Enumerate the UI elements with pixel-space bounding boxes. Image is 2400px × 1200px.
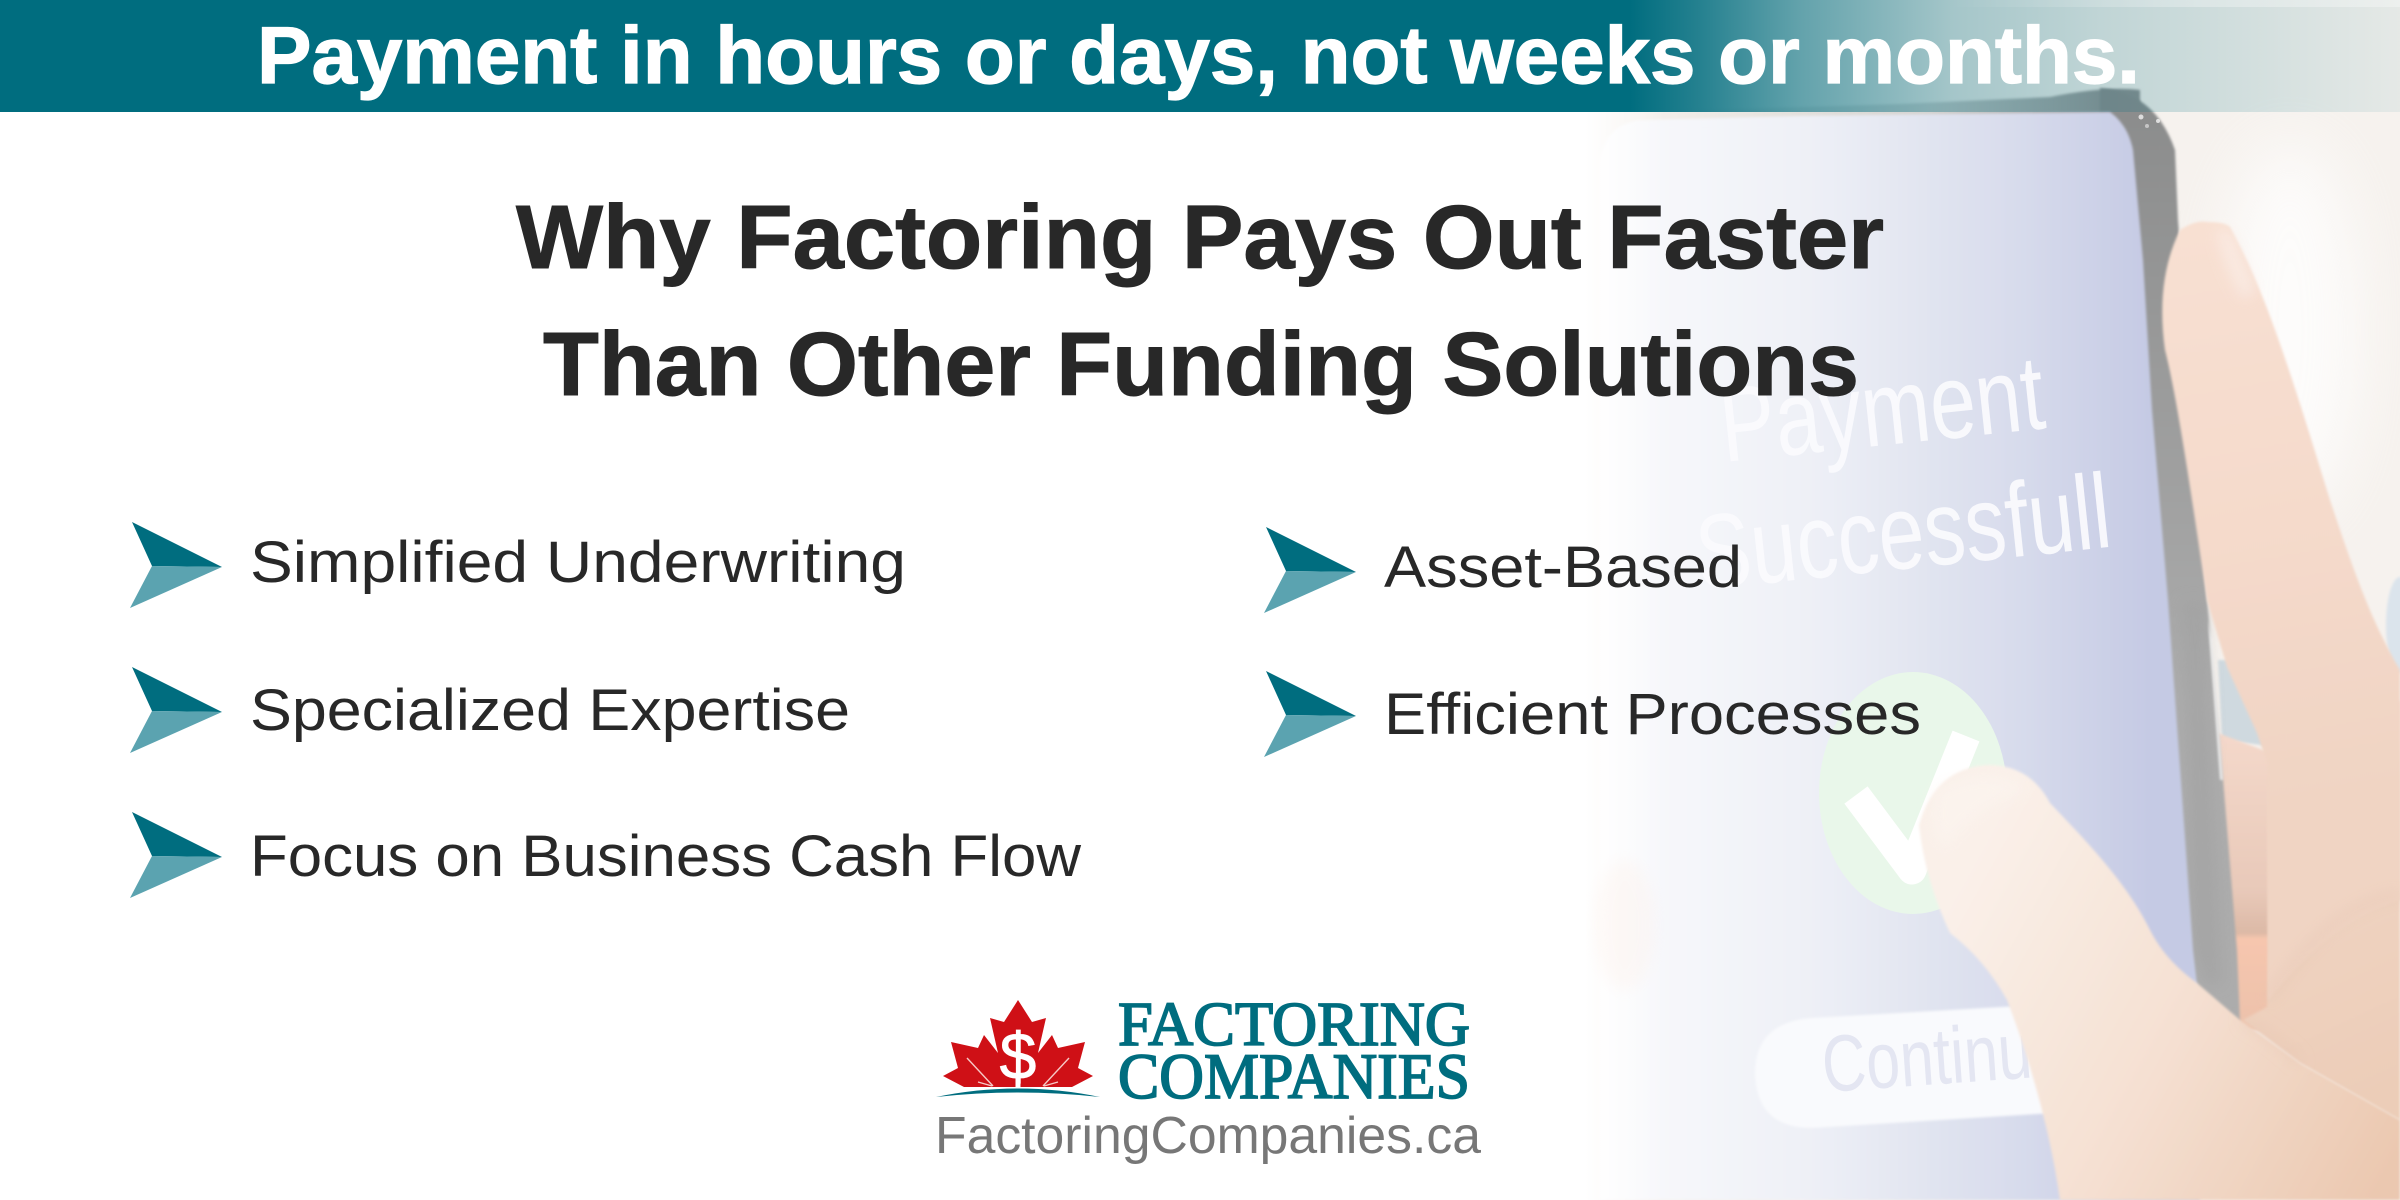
- screen text: Payment Successfull: [1747, 360, 2108, 583]
- logo: [935, 991, 1481, 1165]
- background photo: hand tapping a phone: [1586, 0, 2400, 1200]
- title: Why Factoring Pays Out Faster: [516, 188, 1884, 288]
- icon: maple leaf with dollar sign: [936, 1000, 1100, 1097]
- top banner: [0, 0, 2400, 112]
- website url: FactoringCompanies.ca: [935, 1107, 1481, 1165]
- continue button: [1758, 1006, 2044, 1127]
- banner headline: Payment in hours or days, not weeks or months.: [257, 11, 2140, 101]
- item: Asset-Based: Asset-Based: [1384, 535, 1742, 600]
- hand: index finger: [1919, 765, 2400, 1200]
- continue button: Continu: [1819, 1006, 2035, 1109]
- phone bezel: [1705, 86, 2241, 1020]
- hand: palm: [2243, 700, 2400, 1120]
- item: Simplified Underwriting: Simplified Underwriting: [250, 530, 906, 595]
- success check badge: [1819, 672, 2007, 914]
- title: Than Other Funding Solutions: [543, 315, 1859, 415]
- item: Simplified Underwriting: [130, 522, 906, 608]
- title: [516, 188, 1884, 415]
- icon: maple leaf with dollar sign: $: [1000, 1019, 1036, 1093]
- item: Specialized Expertise: [130, 667, 850, 753]
- right list: [1264, 527, 1921, 757]
- logo wordmark: COMPANIES: [1118, 1041, 1470, 1113]
- item: Focus on Business Cash Flow: [130, 812, 1082, 898]
- left list: [130, 522, 1082, 898]
- screen text: Payment Successfull: Successfull: [1690, 452, 2116, 613]
- thumbnail: [2220, 234, 2252, 294]
- phone screen: [1600, 112, 2200, 1200]
- logo wordmark: FACTORING: [1118, 991, 1470, 1059]
- item: Specialized Expertise: Specialized Expertise: [250, 678, 850, 743]
- hand: thumb beside phone: [2160, 221, 2400, 898]
- index fingernail: [1932, 775, 2030, 850]
- item: Efficient Processes: Efficient Processes: [1384, 682, 1921, 747]
- item: Asset-Based: [1264, 527, 1742, 613]
- logo wordmark: [1118, 991, 1470, 1113]
- second finger behind phone: [2219, 734, 2268, 1030]
- screen text: Payment Successfull: Payment: [1714, 334, 2050, 485]
- item: Focus on Business Cash Flow: Focus on Business Cash Flow: [250, 824, 1082, 889]
- item: Efficient Processes: [1264, 671, 1921, 757]
